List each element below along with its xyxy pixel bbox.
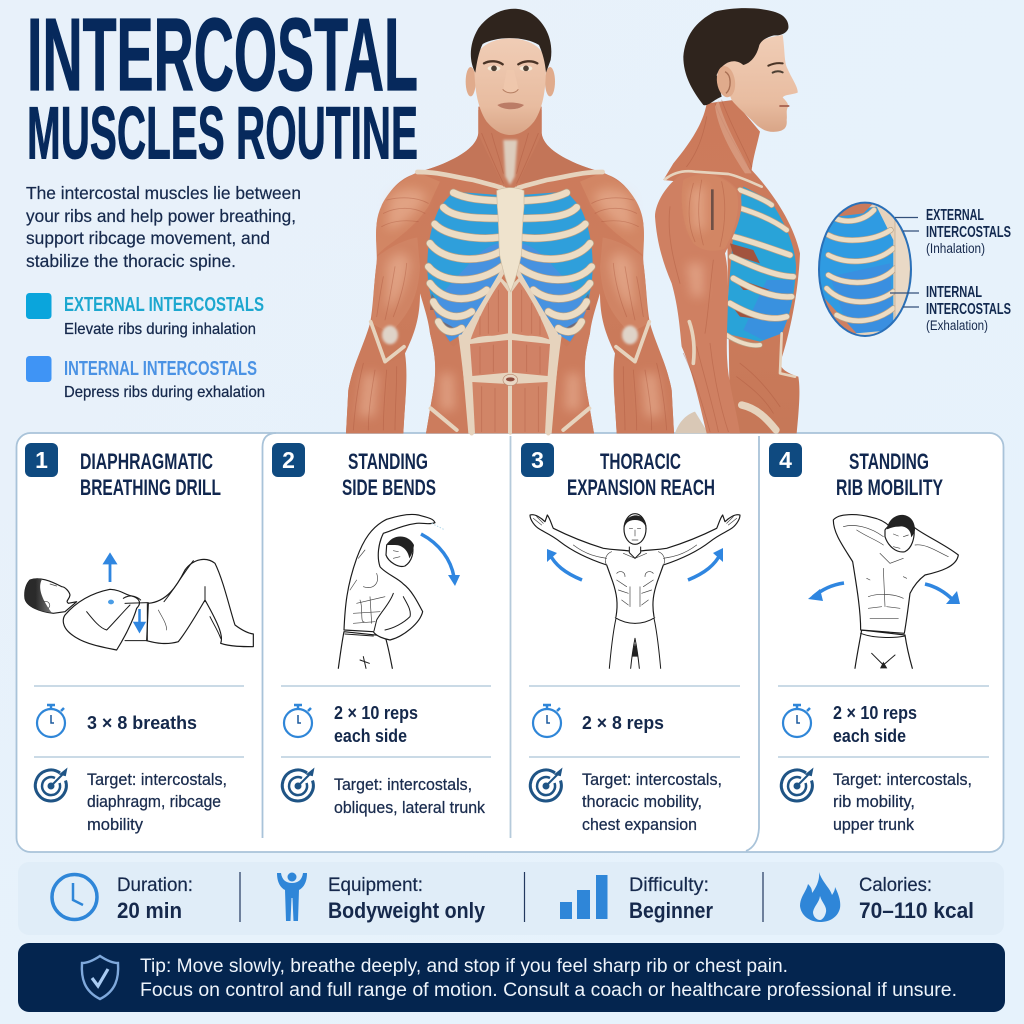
abs blocks xyxy=(471,282,508,339)
stopwatch icon 3 xyxy=(533,705,561,737)
stopwatch icon 2 xyxy=(284,705,312,737)
sternum xyxy=(497,188,524,292)
neck xyxy=(478,107,542,187)
blue intercostals xyxy=(427,192,501,342)
inset labels and leader lines: INTERNAL xyxy=(926,284,982,301)
stats bar xyxy=(18,862,1004,935)
legend: internal intercostals: Depress ribs during exhalation xyxy=(64,384,265,401)
stat: calories: Calories: xyxy=(859,874,932,896)
legend: external intercostals xyxy=(26,293,264,338)
ribs panel xyxy=(725,187,796,342)
card 4: standing rib mobility xyxy=(769,443,960,668)
ribs xyxy=(428,193,502,332)
arrow: curved down xyxy=(421,534,460,586)
badge 1 xyxy=(25,443,58,477)
heading 3 xyxy=(567,449,715,500)
sets text 4 xyxy=(833,702,917,746)
arrow up xyxy=(105,555,115,582)
stat: duration xyxy=(117,874,193,923)
icon: clock xyxy=(52,874,97,920)
target icon 4 xyxy=(781,770,812,801)
arm xyxy=(655,172,741,433)
arrow down xyxy=(135,609,144,631)
target text 3: chest expansion xyxy=(582,816,697,834)
linea alba xyxy=(506,287,514,433)
target text 3 xyxy=(582,771,722,834)
torso silhouette xyxy=(663,100,800,433)
head xyxy=(466,9,555,135)
heading 3: EXPANSION REACH xyxy=(567,475,715,500)
stat: equipment: Equipment: xyxy=(328,874,423,896)
arrow: left xyxy=(808,583,844,601)
target text 1: mobility xyxy=(87,816,144,834)
sets text 2: 2 × 10 reps xyxy=(334,702,418,723)
half body xyxy=(530,515,635,668)
stat: calories: 70–110 kcal xyxy=(859,898,974,923)
abs separators xyxy=(469,337,551,380)
target text 4: upper trunk xyxy=(833,816,915,834)
sets text 4: each side xyxy=(833,725,906,746)
oblique xyxy=(426,293,468,433)
intro paragraph xyxy=(26,183,301,271)
sets text 2 xyxy=(334,702,418,746)
badge 4 xyxy=(769,443,802,477)
stopwatch icon 4 xyxy=(783,705,811,737)
card 3: thoracic expansion reach xyxy=(521,443,740,668)
heading 2 xyxy=(342,449,436,500)
rib detail inset xyxy=(817,200,917,340)
title xyxy=(27,0,418,174)
abs base xyxy=(460,277,510,433)
icon: flame xyxy=(800,872,840,922)
inset border xyxy=(819,203,911,336)
target text 1: diaphragm, ribcage xyxy=(87,793,221,811)
navel xyxy=(503,374,518,386)
target icon 2 xyxy=(282,770,313,801)
stat: difficulty: Difficulty: xyxy=(629,874,709,896)
tip banner xyxy=(18,943,1005,1012)
badge 3 xyxy=(521,443,554,477)
anatomy: side view figure xyxy=(655,8,800,433)
elbow tendon xyxy=(371,322,404,362)
sets text 2: each side xyxy=(334,725,407,746)
stat: difficulty: Beginner xyxy=(629,898,713,923)
target text 1: Target: intercostals, xyxy=(87,771,227,789)
anatomy: front view figure xyxy=(346,9,674,433)
card 1: diaphragmatic breathing drill xyxy=(25,443,253,650)
target text 2: obliques, lateral trunk xyxy=(334,799,486,817)
stat: duration: Duration: xyxy=(117,874,193,896)
icon: person xyxy=(277,872,307,921)
badge 1: 1 xyxy=(35,447,48,473)
front left half xyxy=(346,110,510,433)
card dividers xyxy=(34,686,989,757)
costal margin xyxy=(463,272,503,337)
target text 2 xyxy=(334,776,486,817)
badge 2: 2 xyxy=(282,447,295,473)
heading 4 xyxy=(836,449,943,500)
card 2: standing side bends xyxy=(272,443,460,668)
inset labels and leader lines: (Inhalation) xyxy=(926,241,985,256)
stat: equipment: Bodyweight only xyxy=(328,898,486,923)
sets text 3: 2 × 8 reps xyxy=(582,712,664,733)
stat: difficulty xyxy=(629,874,713,923)
legend: external intercostals: Elevate ribs during inhalation xyxy=(64,321,256,338)
heading 4: STANDING xyxy=(849,449,929,474)
mirror half xyxy=(635,515,740,668)
illustration: side bend xyxy=(338,514,445,668)
target text 2: Target: intercostals, xyxy=(334,776,472,794)
tip text xyxy=(140,956,957,1001)
intro paragraph: support ribcage movement, and xyxy=(26,228,270,248)
illustration: arms spread xyxy=(530,514,740,668)
target icon 1 xyxy=(35,770,66,801)
icon: difficulty bars xyxy=(560,875,608,919)
legend: internal intercostals: INTERNAL INTERCOSTALS xyxy=(64,357,257,380)
title: MUSCLES ROUTINE xyxy=(27,92,418,174)
side head xyxy=(683,8,798,132)
abdomen side xyxy=(780,333,795,377)
arrow: right up xyxy=(688,548,723,580)
target text 4 xyxy=(833,771,972,834)
badge 3: 3 xyxy=(531,447,544,473)
arrow: right xyxy=(925,584,960,604)
target text 4: Target: intercostals, xyxy=(833,771,972,789)
clavicle xyxy=(417,172,503,188)
arrow: left up xyxy=(547,549,582,580)
heading 4: RIB MOBILITY xyxy=(836,475,943,500)
target text 3: thoracic mobility, xyxy=(582,793,702,811)
legend: internal intercostals xyxy=(26,356,265,401)
icon: shield xyxy=(82,956,118,999)
inset oval content xyxy=(820,204,910,335)
heading 3: THORACIC xyxy=(600,449,681,474)
front right half xyxy=(510,110,674,433)
heading 2: STANDING xyxy=(348,449,428,474)
stat: calories xyxy=(859,874,974,923)
intro paragraph: stabilize the thoracic spine. xyxy=(26,251,236,271)
panel: exercise cards xyxy=(16,433,1004,852)
intro paragraph: your ribs and help power breathing, xyxy=(26,206,296,226)
inset labels and leader lines: (Exhalation) xyxy=(926,318,988,333)
target text 1 xyxy=(87,771,227,834)
sets text 4: 2 × 10 reps xyxy=(833,702,917,723)
illustration: lying breathing xyxy=(25,559,253,650)
tip text: Focus on control and full range of motion. Consult a coach or healthcare professional if unsure. xyxy=(140,980,957,1001)
target text 3: Target: intercostals, xyxy=(582,771,722,789)
inset labels and leader lines: EXTERNAL xyxy=(926,207,984,224)
target text 4: rib mobility, xyxy=(833,793,915,811)
stopwatch icon 1 xyxy=(37,705,65,737)
stat: duration: 20 min xyxy=(117,898,182,923)
heading 1: DIAPHRAGMATIC xyxy=(80,449,213,474)
heading 1 xyxy=(80,449,221,500)
illustration: hands behind head xyxy=(833,515,958,668)
legend: external intercostals: EXTERNAL INTERCOSTALS xyxy=(64,293,264,316)
sets text 1: 3 × 8 breaths xyxy=(87,712,197,733)
heading 2: SIDE BENDS xyxy=(342,475,436,500)
badge 4: 4 xyxy=(779,447,792,473)
tip text: Tip: Move slowly, breathe deeply, and stop if you feel sharp rib or chest pain. xyxy=(140,956,788,977)
inset labels and leader lines xyxy=(890,207,1011,333)
stat: equipment xyxy=(328,874,486,923)
heading 1: BREATHING DRILL xyxy=(80,475,221,500)
intro paragraph: The intercostal muscles lie between xyxy=(26,183,301,203)
title: INTERCOSTAL xyxy=(27,0,418,112)
target icon 3 xyxy=(530,770,561,801)
badge 2 xyxy=(272,443,305,477)
